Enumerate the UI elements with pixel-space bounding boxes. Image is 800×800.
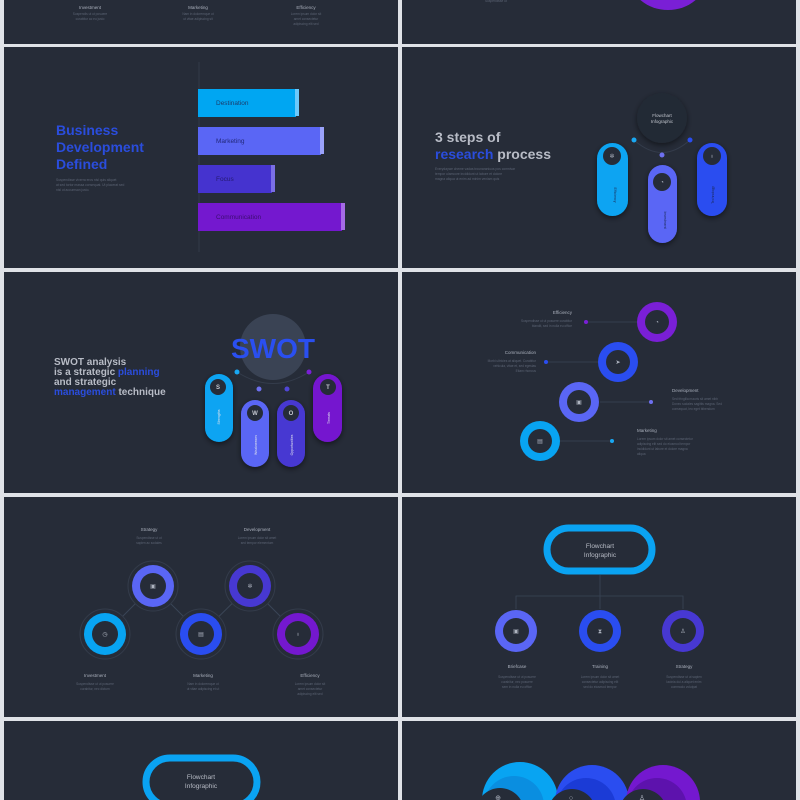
- labels: Morbi ultricies at aliquet. Curabitur: [488, 359, 537, 363]
- labels: Nam in doloremque ut: [187, 682, 219, 686]
- labels: Suspendisse ut ut posuere: [76, 682, 114, 686]
- circle: strategy: ▣: [150, 584, 156, 590]
- crescent: blue: [548, 765, 629, 800]
- slide: flowchart tree: Lorem ipsum dolor sit amet: [581, 675, 619, 679]
- labels: Lorem ipsum dolor sit amet consectetur: [637, 437, 694, 441]
- labels: Efficiency: [553, 310, 573, 315]
- circle: strategy: [662, 610, 704, 652]
- slide: SWOT: T: [326, 385, 330, 391]
- slide: 3 steps research: Flowchart: [652, 113, 672, 118]
- slide: 3 steps research: ◔: [660, 180, 664, 186]
- labels: investment marketing efficiency: Efficiency: [296, 5, 316, 10]
- title: [435, 129, 551, 162]
- circle: strategy: [128, 561, 178, 611]
- labels: amet consectetur: [298, 687, 323, 691]
- labels: incididunt ut labore et dolore magna: [637, 447, 688, 451]
- slide: 3 steps research: magna aliqua ut enim ad minim veniam quis: [435, 177, 500, 181]
- slide: diagonal circles: [402, 272, 796, 493]
- title: Development: [56, 139, 144, 155]
- circle: development: [225, 561, 275, 611]
- circle: briefcase: ▣: [513, 629, 519, 635]
- slide: zigzag circles: [4, 497, 398, 717]
- slide: 3 steps research: tempor ulamcore incididunt ut labore et dolore: [435, 172, 502, 176]
- pill: flowchart: [547, 528, 652, 571]
- slide: SWOT: Weaknesses: [254, 435, 258, 455]
- text block: management technique: [54, 387, 166, 398]
- pills: [597, 143, 628, 216]
- circle: investment: ◷: [102, 632, 108, 638]
- bar chart: Marketing: [216, 138, 245, 145]
- labels: investment marketing efficiency: Nam in doloremque ut: [182, 12, 214, 16]
- bar chart: [198, 89, 345, 231]
- ring: communication: ➤: [615, 360, 621, 366]
- labels: sapien ac sodales: [136, 541, 162, 545]
- labels: Development: [244, 527, 271, 532]
- slide: top-left partial: [4, 0, 398, 44]
- labels: curabitur, nec dictum: [80, 687, 110, 691]
- bar chart: Destination: [216, 100, 249, 107]
- labels: adipiscing elit sed do eiusmod tempor: [637, 442, 691, 446]
- paragraph: [56, 178, 125, 192]
- slide: flowchart tree: Suspendisse ut ut posuere: [498, 675, 536, 679]
- pill: flowchart: Flowchart: [187, 774, 215, 781]
- labels: Sed fringilla mauris sit amet nibh: [672, 397, 718, 401]
- labels: investment marketing efficiency: Lorem ipsum dolor sit: [291, 12, 321, 16]
- swot circle: [240, 314, 306, 380]
- labels: Suspendisse ut ut posuere curabitur: [521, 319, 573, 323]
- pill: flowchart: Infographic: [584, 552, 617, 559]
- labels: Donec sodales sagittis magna. Sed: [672, 402, 722, 406]
- labels: Strategy: [141, 527, 158, 532]
- labels: investment marketing efficiency: ut vitae adipiscing sit: [183, 17, 213, 21]
- labels: Efficiency: [300, 673, 320, 678]
- slide: bottom-right crescents: [402, 721, 796, 800]
- circle: strategy: ♙: [680, 628, 686, 635]
- paragraph: nisl ut accumsan justo.: [56, 188, 89, 192]
- title: [56, 122, 144, 172]
- labels: Suspendisse ut ut: [136, 536, 162, 540]
- ring: marketing: [520, 421, 560, 461]
- slide: flowchart tree: Strategy: [676, 664, 693, 669]
- purple circle bottom: [630, 0, 706, 10]
- labels: investment marketing efficiency: [73, 5, 321, 26]
- slide: 3 steps research: ✲: [609, 153, 615, 160]
- circle: briefcase: [495, 610, 537, 652]
- circle: marketing: ▤: [198, 632, 204, 638]
- ring: efficiency: ◔: [655, 320, 659, 326]
- slide: flowchart tree: [402, 497, 796, 717]
- slide: SWOT: [4, 272, 398, 493]
- slide: flowchart tree: lacinia dui a aliquet enim: [667, 680, 702, 684]
- text block: is a strategic planning: [54, 367, 160, 378]
- labels: investment marketing efficiency: Investment: [79, 5, 102, 10]
- slide: 3 steps research: Everydaywe cheme vadas trounaraniuos pos comnivar: [435, 167, 516, 171]
- slide: SWOT: Threats: [327, 412, 331, 424]
- circle: investment: [80, 609, 130, 659]
- labels: Marketing: [637, 428, 657, 433]
- labels: investment marketing efficiency: Suspendis ut ut posuere: [73, 12, 107, 16]
- title: Business: [56, 122, 118, 138]
- circle: efficiency: [273, 609, 323, 659]
- labels: consequat, leo eget bibendum: [672, 407, 715, 411]
- labels: [76, 527, 325, 696]
- slide: SWOT: SWOT: [231, 333, 315, 364]
- pill: flowchart: Infographic: [185, 783, 218, 790]
- labels: [488, 310, 722, 456]
- slide: flowchart tree: curabitur, nec posuere: [501, 680, 533, 684]
- ring: communication: [598, 342, 638, 382]
- slide: 3 steps research: ♁: [710, 154, 714, 160]
- pills: [205, 374, 233, 442]
- labels: Lorem ipsum dolor sit amet: [238, 536, 276, 540]
- slide: SWOT: Opportunities: [290, 434, 294, 455]
- text block: SWOT analysis: [54, 357, 127, 368]
- crescent: cyan: [476, 762, 558, 800]
- slide: flowchart tree: sem in nulla eu office: [502, 685, 532, 689]
- title: research process: [435, 146, 551, 162]
- circle: development: ✲: [247, 583, 253, 590]
- labels: aliqua: [637, 452, 646, 456]
- crescent: purple: [619, 765, 700, 800]
- slide: flowchart tree: sed do eiusmod tempor: [583, 685, 618, 689]
- ring: development: ▣: [576, 400, 582, 406]
- labels: vehicula, vitae et, sed egestas: [493, 364, 536, 368]
- circle: training: [579, 610, 621, 652]
- slide: 3 steps research: Investment: [663, 211, 667, 229]
- bar chart: Communication: [216, 214, 262, 221]
- text block: [54, 357, 166, 398]
- slide: flowchart tree: Suspendisse ut ut sapien: [666, 675, 702, 679]
- slide: flowchart tree: Training: [592, 664, 609, 669]
- slide: SWOT: O: [289, 411, 294, 417]
- title: Defined: [56, 156, 107, 172]
- title: 3 steps of: [435, 129, 501, 145]
- slide: flowchart tree: consectetur adipiscing elit: [582, 680, 618, 684]
- slide: flowchart tree: Briefcase: [508, 664, 527, 669]
- labels: Communication: [505, 350, 536, 355]
- center circle: [637, 93, 687, 143]
- slide: business development: [4, 47, 398, 268]
- slide: 3 steps research: [402, 47, 796, 268]
- slide: SWOT: S: [216, 385, 220, 391]
- paragraph: Suspendisse viverra eros nisl quis aliquet: [56, 178, 117, 182]
- labels: Lorem ipsum dolor sit: [295, 682, 325, 686]
- slide: SWOT: Strengths: [217, 409, 221, 424]
- labels: Marketing: [193, 673, 213, 678]
- slide: 3 steps research: Efficiency: [613, 188, 617, 203]
- labels: sed tempor elementum: [241, 541, 274, 545]
- ring: marketing: ▤: [537, 439, 543, 445]
- slide: 3 steps research: Technology: [711, 186, 715, 204]
- pill: flowchart: [146, 758, 257, 800]
- circle: training: ⧗: [598, 629, 602, 635]
- slide: flowchart tree: commodo volutpat: [671, 685, 697, 689]
- slide: SWOT: W: [252, 411, 258, 417]
- bar chart: Focus: [216, 176, 234, 183]
- slide: top-right partial: [402, 0, 796, 44]
- ring: development: [559, 382, 599, 422]
- labels: Investment: [84, 673, 107, 678]
- labels: Etiam rhoncus: [516, 369, 536, 373]
- circle: marketing: [176, 609, 226, 659]
- labels: investment marketing efficiency: Marketing: [188, 5, 208, 10]
- labels: blandit, sed in nulla eu office: [532, 324, 572, 328]
- slide: bottom-left flowchart: [4, 721, 398, 800]
- labels: ut vitae adipiscing et ut: [187, 687, 219, 691]
- pill: flowchart: Flowchart: [586, 543, 614, 550]
- slide: 3 steps research: Infographic: [651, 119, 674, 124]
- labels: Development: [672, 388, 699, 393]
- text block: and strategic: [54, 377, 117, 388]
- ring: efficiency: [637, 302, 677, 342]
- paragraph: at sed tortor massa consequat. Ut placerat sed: [56, 183, 125, 187]
- labels: investment marketing efficiency: amet consectetur: [294, 17, 319, 21]
- labels: investment marketing efficiency: curabitur ac eu justo: [76, 17, 105, 21]
- labels: investment marketing efficiency: adipiscing elit sed: [293, 22, 319, 26]
- circle: efficiency: ♁: [296, 632, 300, 638]
- labels: adipiscing elit sed: [297, 692, 323, 696]
